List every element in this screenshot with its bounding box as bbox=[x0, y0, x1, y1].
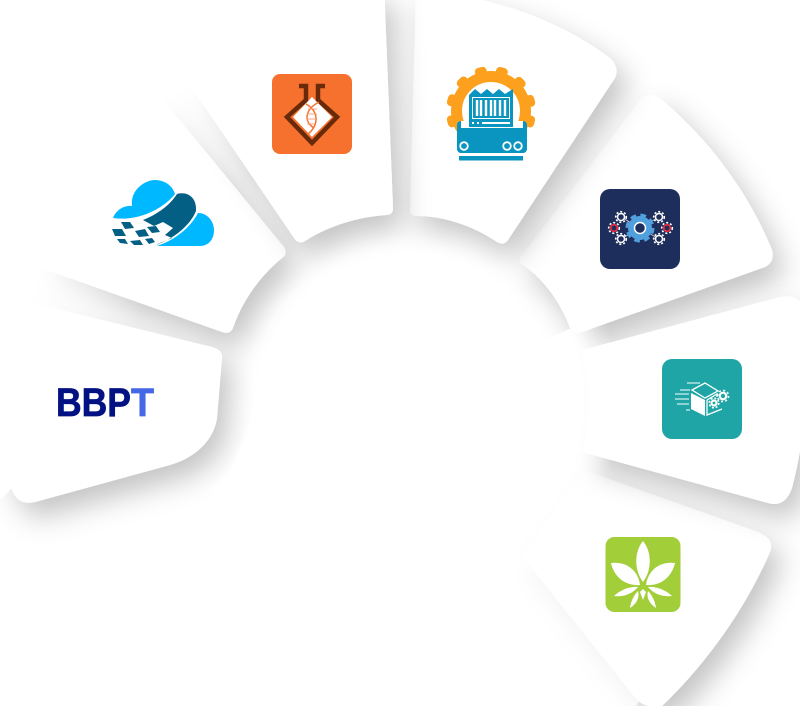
icon: barcode printer with gear bbox=[440, 70, 542, 163]
icon: box with gears bbox=[662, 359, 742, 439]
panel: printer segment bbox=[410, 0, 617, 244]
icon: cloud bbox=[112, 180, 214, 246]
panel: hemp segment bbox=[522, 470, 771, 706]
panel: gears segment bbox=[520, 95, 773, 333]
icon: connected gears bbox=[600, 189, 680, 269]
center circle bbox=[255, 250, 555, 550]
icon: hemp leaf bbox=[606, 537, 680, 612]
panel: cloud segment bbox=[30, 40, 286, 333]
icon: flask with DNA bbox=[272, 74, 352, 154]
logo: BBPT: T bbox=[131, 381, 154, 425]
panel: box segment bbox=[582, 296, 800, 504]
logo: BBPT: BBP bbox=[56, 381, 131, 425]
panel: BBPT segment bbox=[0, 290, 222, 503]
panel: flask segment bbox=[190, 0, 393, 242]
